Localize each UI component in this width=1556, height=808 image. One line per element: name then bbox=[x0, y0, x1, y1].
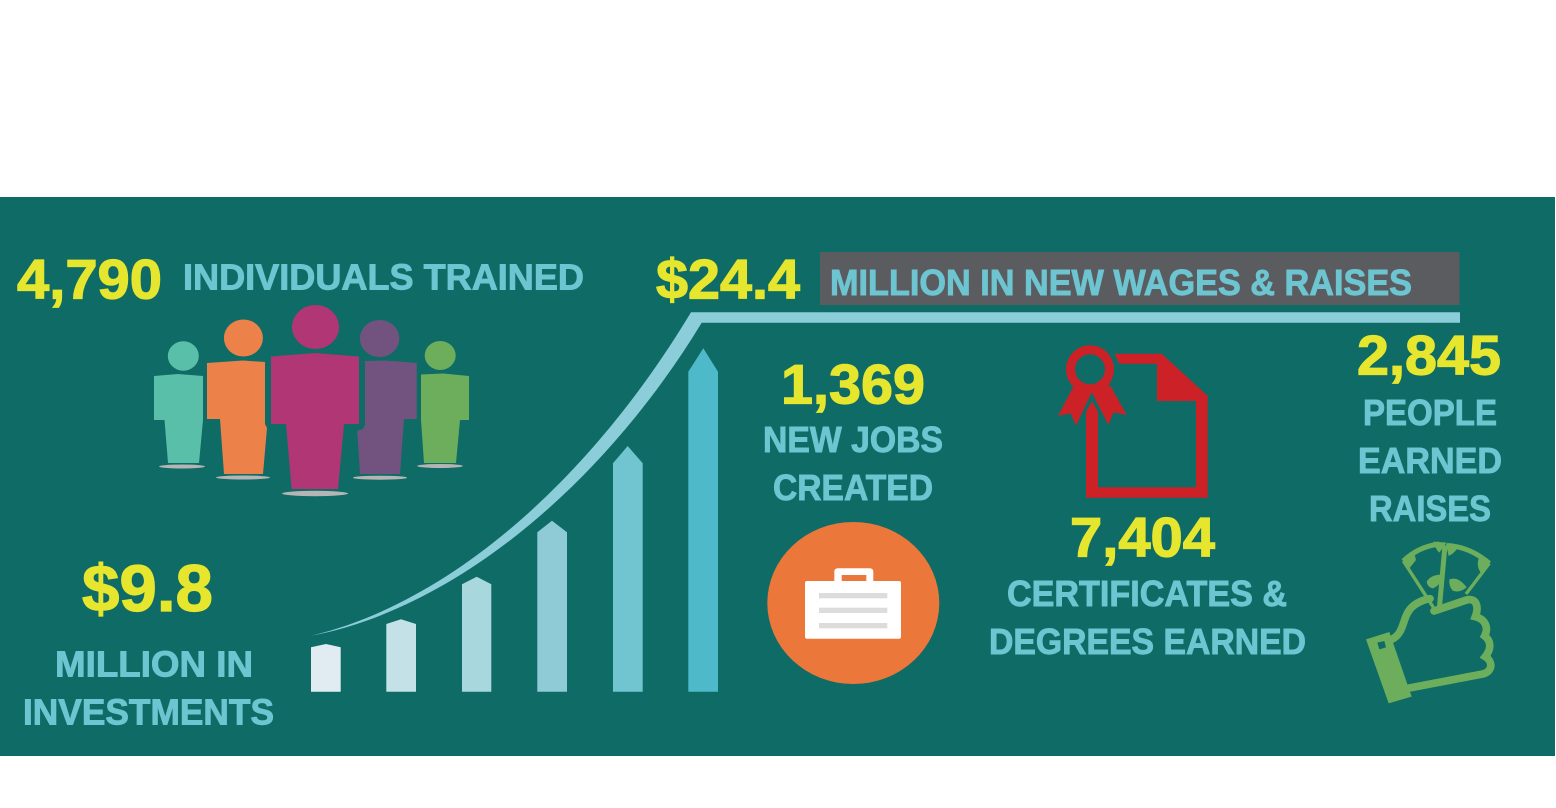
stat: 2,845 people earned raises: EARNED bbox=[1358, 440, 1502, 481]
icon: briefcase in orange circle bbox=[767, 522, 939, 684]
banknote centre divider bbox=[1439, 545, 1445, 609]
number: $9.8: $9.8 bbox=[82, 551, 213, 625]
person: orange bbox=[207, 320, 270, 480]
number: 2,845: 2,845 bbox=[1357, 324, 1501, 386]
banknote right corners bbox=[1446, 544, 1490, 573]
icon: certificate with ribbon bbox=[1058, 345, 1208, 498]
bar 1 bbox=[311, 644, 341, 692]
document outline bbox=[1086, 354, 1208, 498]
stat: $24.4 million in new wages and raises bbox=[656, 248, 1460, 310]
ribbon seal bbox=[1066, 345, 1114, 393]
person: green bbox=[417, 341, 469, 468]
bar 6 bbox=[688, 348, 718, 692]
person: purple bbox=[353, 320, 417, 480]
label: certificates and degrees earned: CERTIFICATES & bbox=[1007, 573, 1287, 614]
stat: 2,845 people earned raises: RAISES bbox=[1369, 488, 1491, 529]
growth curve line bbox=[311, 312, 1460, 636]
label: new jobs created: NEW JOBS bbox=[763, 419, 943, 460]
label: individuals trained: INDIVIDUALS TRAINED bbox=[183, 257, 584, 298]
icon: hand holding money bbox=[1366, 542, 1491, 703]
bar 3 bbox=[462, 577, 491, 692]
banknote left corners bbox=[1403, 542, 1447, 568]
person: magenta bbox=[271, 305, 359, 496]
label: people earned raises: PEOPLE bbox=[1363, 392, 1497, 433]
panel: teal background bbox=[0, 197, 1555, 756]
cuff bbox=[1366, 632, 1412, 703]
number: $24.4: $24.4 bbox=[656, 248, 800, 310]
stat: 2,845 people earned raises bbox=[1357, 324, 1502, 529]
label box: grey background bbox=[820, 252, 1460, 305]
stat: 1,369 new jobs created: CREATED bbox=[773, 467, 933, 508]
banknote right bbox=[1447, 545, 1489, 594]
bar 4 bbox=[537, 521, 567, 692]
label: million in new wages and raises: MILLION IN NEW WAGES & RAISES bbox=[830, 262, 1412, 303]
heading: individuals trained bbox=[17, 248, 584, 310]
stat: $9.8 million in investments: INVESTMENTS bbox=[23, 692, 274, 732]
number: 1,369: 1,369 bbox=[781, 352, 925, 416]
label: million in investments: MILLION IN bbox=[55, 644, 253, 685]
number: 4,790: 4,790 bbox=[17, 248, 162, 310]
stat: 7,404 certificates and degrees earned bbox=[989, 506, 1306, 662]
bar chart: six rising arrows bbox=[311, 348, 718, 692]
number: 7,404: 7,404 bbox=[1070, 506, 1215, 568]
stat: 7,404 certificates and degrees earned: DEGREES EARNED bbox=[989, 621, 1306, 662]
stat: 1,369 new jobs created bbox=[763, 352, 943, 508]
hand outline bbox=[1392, 599, 1491, 688]
person: teal bbox=[154, 341, 205, 468]
icon: group of five people bbox=[154, 305, 469, 496]
bar 5 bbox=[613, 446, 643, 692]
bar 2 bbox=[386, 619, 416, 692]
banknote leaf marks bbox=[1427, 574, 1442, 588]
stat: $9.8 million in investments bbox=[23, 551, 274, 732]
banknote left bbox=[1403, 544, 1439, 607]
